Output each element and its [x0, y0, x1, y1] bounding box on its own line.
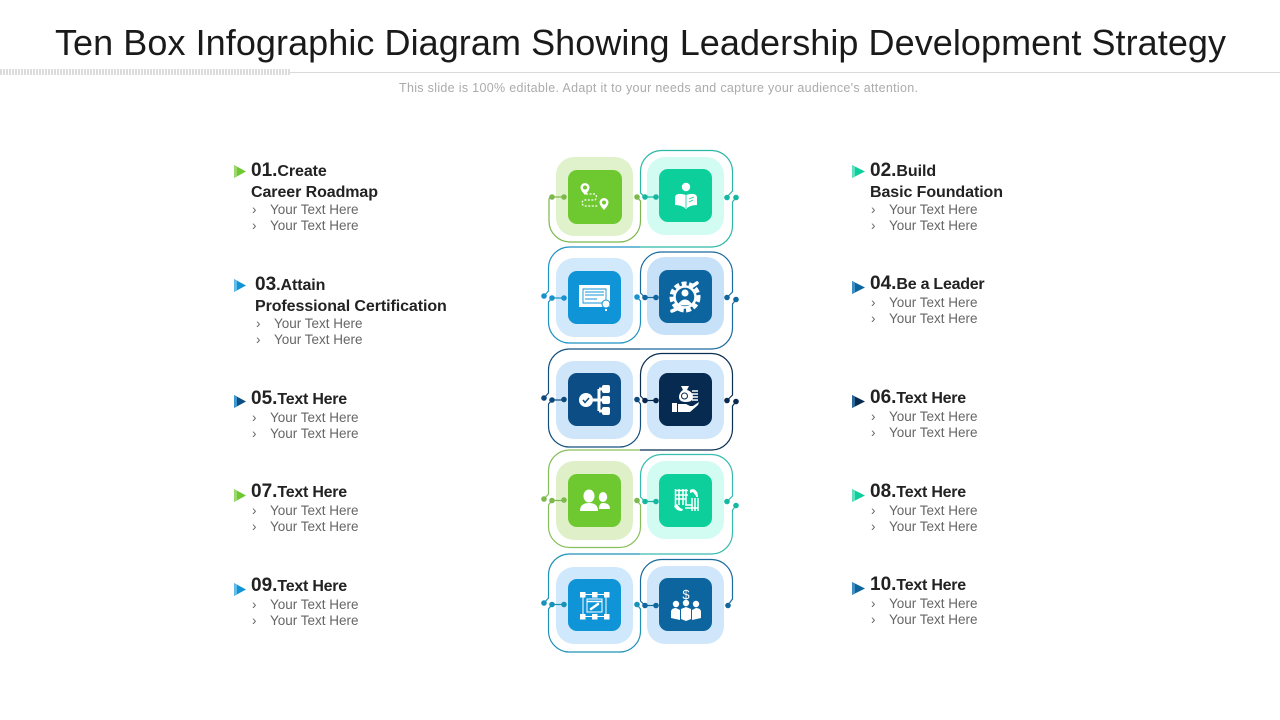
item 02: › [871, 202, 876, 217]
item 09: › [252, 597, 256, 612]
item 10: 10.Text Here [870, 574, 966, 595]
connector: box 3 [541, 247, 640, 343]
item 01 [234, 160, 378, 233]
item 07: 07.Text Here [251, 481, 347, 502]
arrow: teal [852, 165, 865, 178]
item 08 [852, 481, 978, 534]
item 06: › [871, 409, 876, 424]
item 03: Your Text Here [274, 316, 363, 331]
item 07 [234, 481, 359, 534]
connector: box 2 [640, 150, 739, 247]
icon: browser with link [580, 592, 610, 620]
item 06 [852, 387, 978, 440]
item 05: 05.Text Here [251, 388, 347, 409]
item 04: Your Text Here [889, 311, 978, 326]
item 01: 01.Create [251, 160, 327, 181]
item 03: Professional Certification [255, 298, 447, 315]
item 06: Your Text Here [889, 425, 978, 440]
item 05: Your Text Here [270, 426, 359, 441]
item 03: › [256, 316, 260, 331]
item 02: 02.Build [870, 160, 936, 181]
item 05: › [252, 426, 256, 441]
item 10: Your Text Here [889, 596, 978, 611]
icon: gear, wrench and leader [672, 283, 698, 311]
item 03: › [256, 332, 260, 347]
item 10: › [871, 596, 876, 611]
item 02: Basic Foundation [870, 184, 1003, 201]
connector: box 6 [640, 354, 739, 450]
item 08: Your Text Here [889, 519, 978, 534]
item 05: › [252, 410, 256, 425]
item 01: Career Roadmap [251, 184, 378, 201]
item 07: Your Text Here [270, 519, 359, 534]
arrow: blue [234, 583, 246, 596]
arrow: darkest navy [852, 395, 865, 408]
item 01: › [252, 218, 256, 233]
icon: buildings with exchange arrows [674, 489, 698, 511]
item 07: › [252, 503, 256, 518]
connector: box 10 [640, 560, 732, 608]
item 03 [234, 274, 447, 347]
connector: box 8 [640, 454, 739, 554]
box 7: two users [556, 461, 633, 540]
item 09: Your Text Here [270, 613, 359, 628]
item 07: Your Text Here [270, 503, 359, 518]
item 02 [852, 160, 1003, 233]
item 02: › [871, 218, 876, 233]
item 06: › [871, 425, 876, 440]
item 01: Your Text Here [270, 202, 359, 217]
connector: box 7 [541, 450, 641, 548]
box 2: build basic foundation [647, 157, 724, 235]
icon: two people [580, 490, 610, 511]
item 03: Your Text Here [274, 332, 363, 347]
item 08: › [871, 503, 876, 518]
title: Ten Box Infographic Diagram Showing Leadership Development Strategy [55, 22, 1226, 63]
icon: map pins and route [580, 183, 608, 210]
box 1: career roadmap [556, 157, 633, 236]
box 6: money in hand [647, 360, 724, 439]
item 04: Your Text Here [889, 295, 978, 310]
item 10: › [871, 612, 876, 627]
icon: check with branches [579, 385, 610, 415]
arrow: blue [234, 279, 246, 292]
box 9: web link network [556, 567, 633, 644]
item 01: › [252, 202, 256, 217]
item 08: 08.Text Here [870, 481, 966, 502]
header rule [0, 69, 1280, 75]
box 8: buildings and phones [647, 461, 724, 539]
box 5: hierarchy [556, 361, 633, 439]
icon: team with dollar sign: $ [682, 587, 690, 602]
icon: hand holding money bag [672, 386, 699, 412]
item 10 [852, 574, 978, 627]
item 09: Your Text Here [270, 597, 359, 612]
item 05: Your Text Here [270, 410, 359, 425]
central diagram [541, 150, 739, 652]
item 06: Your Text Here [889, 409, 978, 424]
item 04 [852, 273, 984, 326]
item 02: Your Text Here [889, 218, 978, 233]
arrow: teal [852, 489, 865, 502]
item 04: › [871, 311, 876, 326]
item 04: › [871, 295, 876, 310]
item 09 [234, 575, 359, 628]
arrow: dark blue [852, 582, 865, 595]
arrow: green [234, 489, 246, 502]
connector: box 9 [541, 554, 640, 652]
icon: certificate [579, 285, 610, 311]
connector: box 4 [640, 252, 739, 349]
item 07: › [252, 519, 256, 534]
item 08: › [871, 519, 876, 534]
box 3: attain professional certification [556, 258, 633, 337]
arrow: green [234, 165, 246, 178]
box 4: be a leader [647, 257, 724, 335]
connector: box 5 [541, 349, 640, 447]
item 06: 06.Text Here [870, 387, 966, 408]
item 09: 09.Text Here [251, 575, 347, 596]
connector: box 1 [549, 194, 640, 242]
item 10: Your Text Here [889, 612, 978, 627]
item 04: 04.Be a Leader [870, 273, 984, 294]
arrow: dark blue [852, 281, 865, 294]
item 05 [234, 388, 359, 441]
item 09: › [252, 613, 256, 628]
subtitle: This slide is 100% editable. Adapt it to your needs and capture your audience's attention. [399, 81, 918, 95]
item 08: Your Text Here [889, 503, 978, 518]
icon: person reading a book [675, 183, 697, 209]
box 10: dollar team [647, 566, 724, 644]
item 01: Your Text Here [270, 218, 359, 233]
arrow: navy [234, 395, 246, 408]
item 03: 03.Attain [255, 274, 325, 295]
item 02: Your Text Here [889, 202, 978, 217]
